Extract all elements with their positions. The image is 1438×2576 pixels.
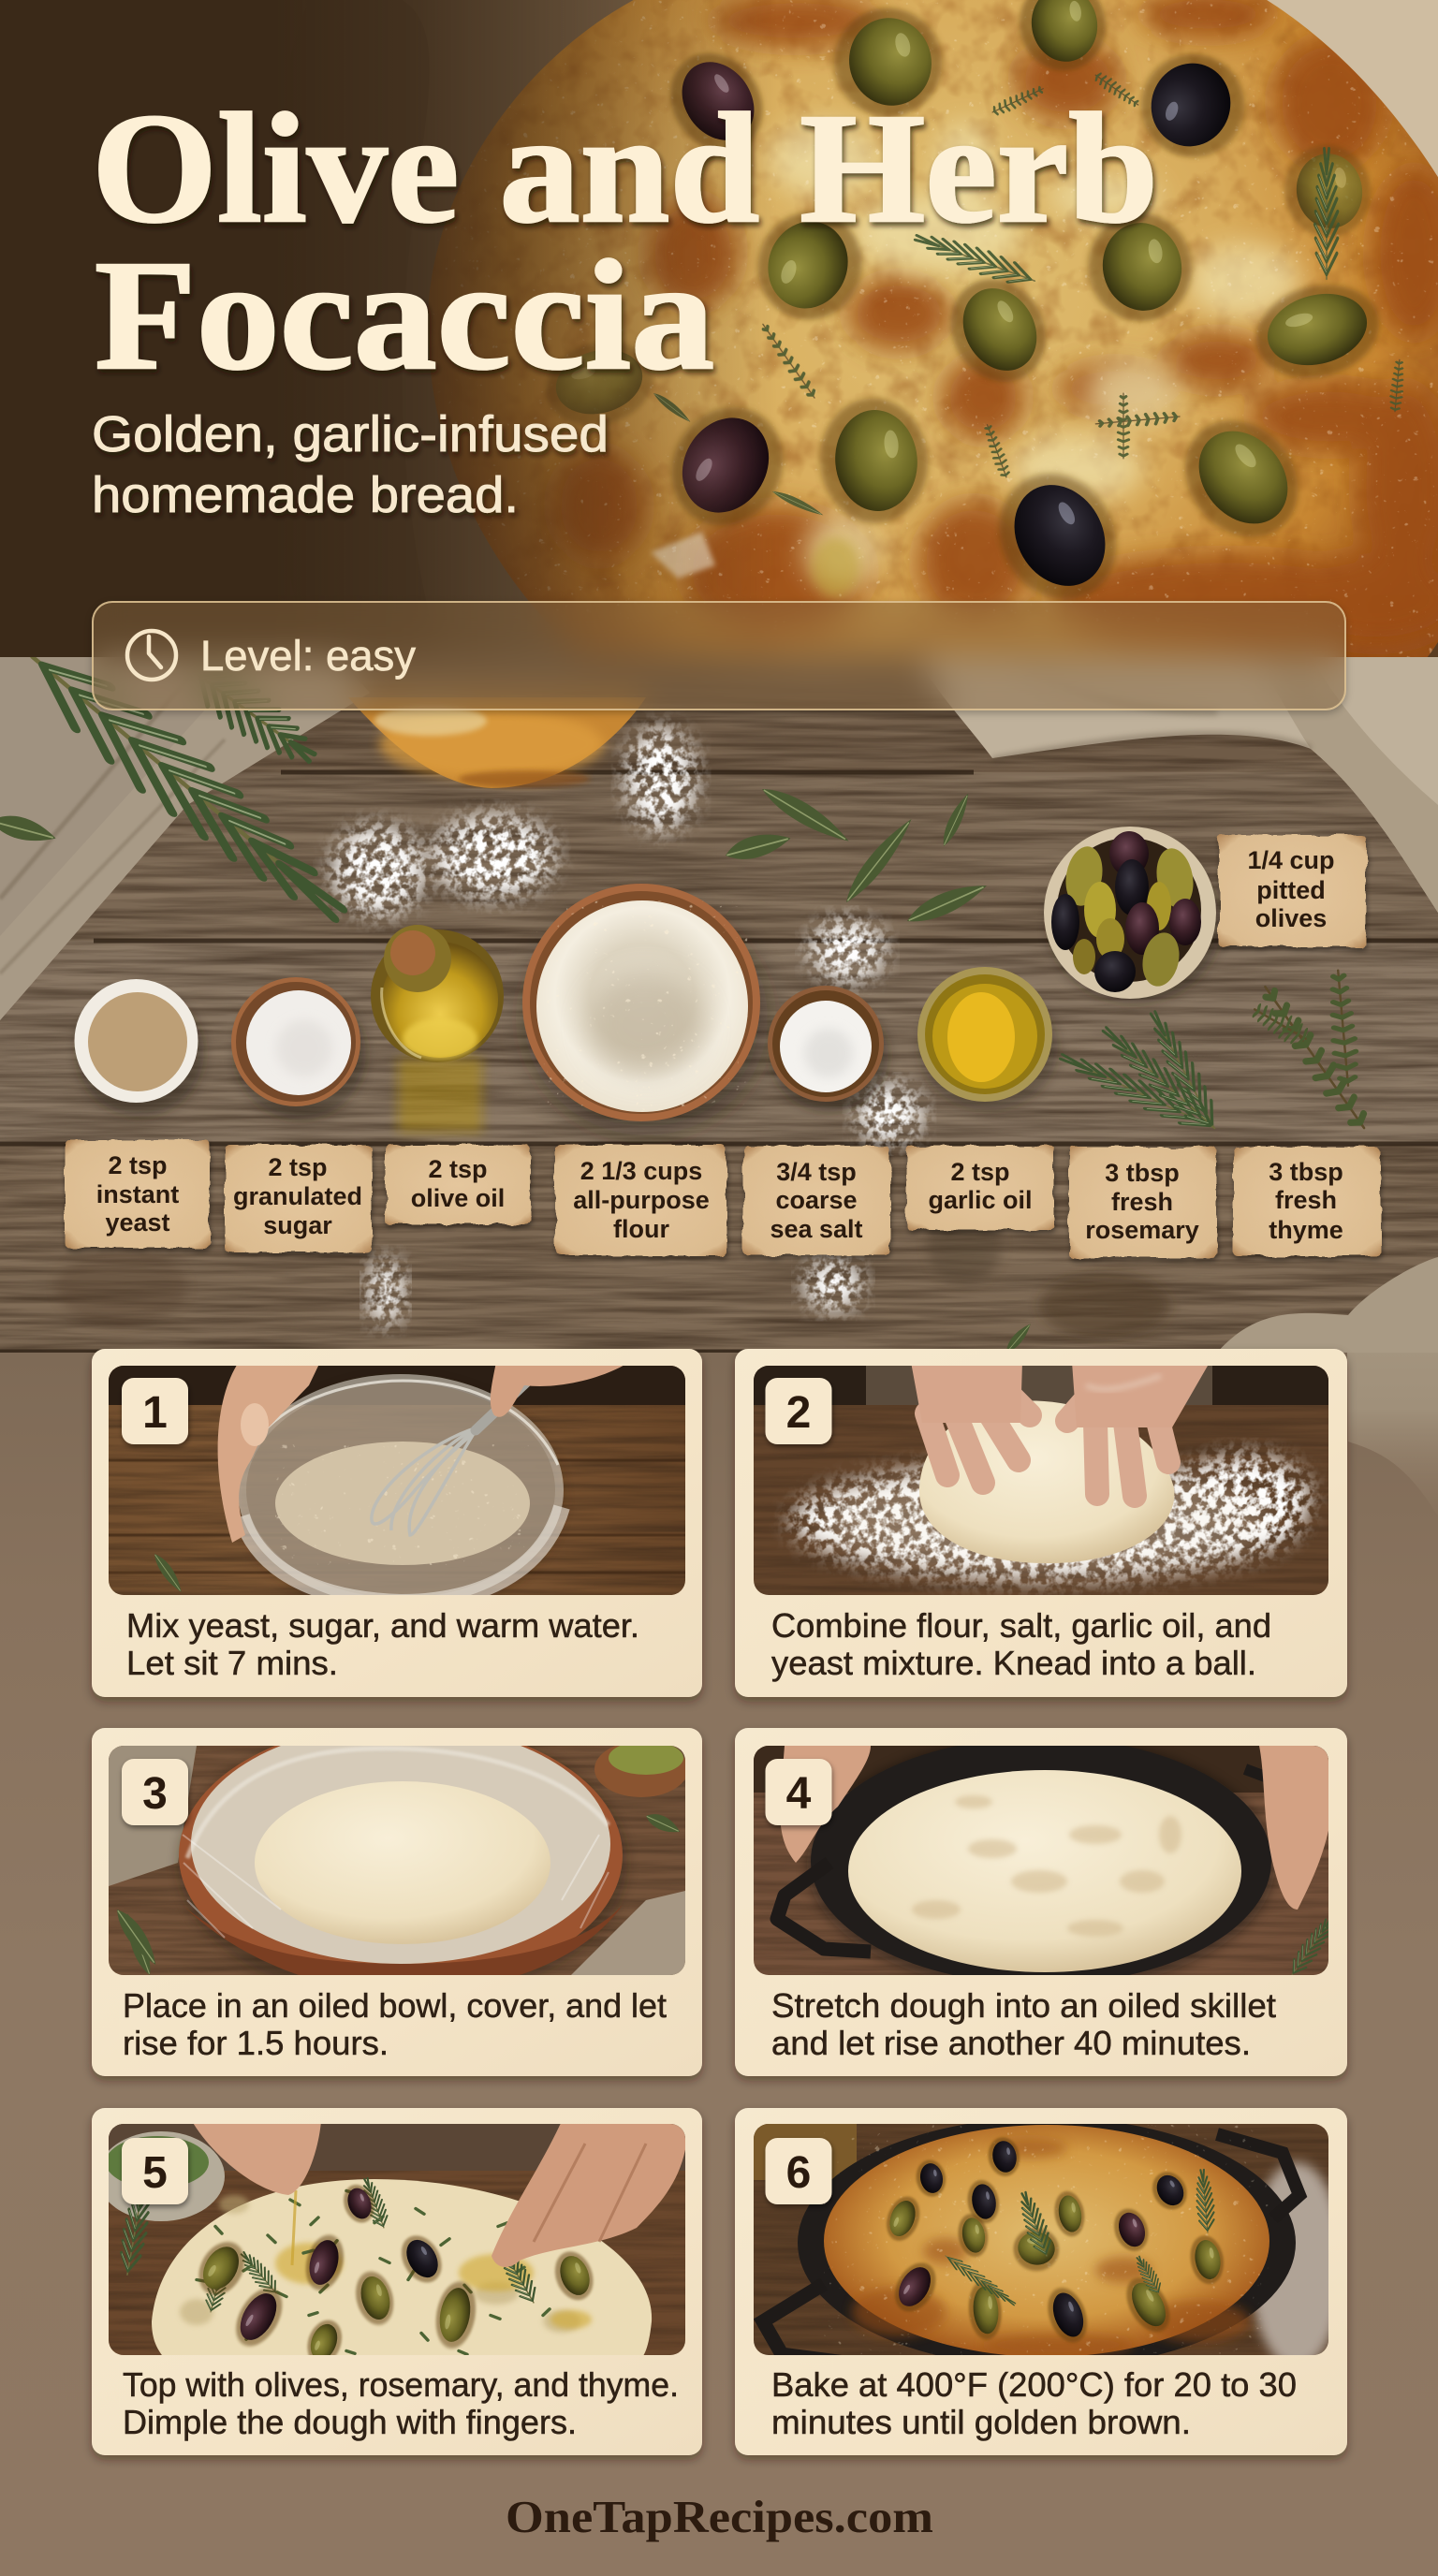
hero photo: focaccia <box>0 0 1438 711</box>
ingredient: rosemary sprigs <box>1057 1007 1225 1138</box>
difficulty level text: Level: easy <box>200 631 416 680</box>
step 4 photo: dough stretched in skillet <box>754 1737 1341 1992</box>
step 2 card <box>735 1349 1347 1697</box>
ingredient labels <box>65 835 1381 1258</box>
icon: olive leaves <box>0 780 1034 1355</box>
ingredient: granulated sugar bowl <box>231 977 366 1120</box>
step 3 text: rise for 1.5 hours. <box>123 2024 389 2062</box>
number badge 6 <box>766 2138 831 2204</box>
label: pitted olives <box>1219 835 1366 946</box>
step 1 text: Mix yeast, sugar, and warm water. <box>126 1606 639 1645</box>
label: fresh thyme: 3 tbsp <box>1269 1158 1343 1186</box>
label: olive oil <box>386 1145 531 1224</box>
linen cloth right <box>917 657 1438 913</box>
step 1 text <box>126 1606 639 1682</box>
footer website: OneTapRecipes.com <box>506 2491 933 2542</box>
icon: rosemary and thyme on bread <box>652 70 1404 519</box>
label: all-purpose flour: all-purpose <box>573 1186 710 1214</box>
step 3 card <box>92 1722 702 2076</box>
step 4 card <box>735 1728 1347 2076</box>
label: granulated sugar <box>225 1145 372 1252</box>
ingredient: thyme sprigs <box>1249 969 1373 1134</box>
label: fresh rosemary: fresh <box>1111 1188 1173 1216</box>
label: coarse sea salt: 3/4 tsp <box>776 1158 857 1186</box>
label: instant yeast <box>65 1140 210 1248</box>
label: garlic oil: garlic oil <box>928 1186 1033 1214</box>
step 4 text: and let rise another 40 minutes. <box>771 2024 1251 2062</box>
label: granulated sugar: sugar <box>263 1211 332 1239</box>
subtitle: homemade bread. <box>92 467 519 523</box>
loaf edge under the bar <box>348 697 646 788</box>
label: fresh thyme: thyme <box>1269 1216 1343 1244</box>
label: coarse sea salt: sea salt <box>770 1215 863 1243</box>
ingredient: instant yeast bowl <box>75 979 204 1117</box>
linen cloth left <box>0 657 370 1020</box>
step 3 text <box>123 1986 667 2062</box>
icon: clock <box>127 631 176 680</box>
number badge 3: 3 <box>142 1769 168 1819</box>
step 5 photo: topping dimpled dough <box>97 2121 688 2369</box>
label: fresh thyme: fresh <box>1275 1186 1337 1214</box>
step 5 card <box>92 2108 702 2455</box>
flour dust <box>331 727 923 1325</box>
number badge 1 <box>122 1378 188 1444</box>
number badge 4: 4 <box>786 1769 812 1819</box>
subtitle <box>92 406 609 523</box>
step 2 text: Combine flour, salt, garlic oil, and <box>771 1606 1271 1645</box>
label: instant yeast: 2 tsp <box>108 1151 168 1179</box>
title: Focaccia <box>95 228 714 402</box>
label: all-purpose flour: 2 1/3 cups <box>580 1157 702 1185</box>
number badge 4 <box>766 1759 831 1825</box>
difficulty bar <box>92 601 1346 710</box>
number badge 5: 5 <box>142 2148 168 2198</box>
step 5 text: Dimple the dough with fingers. <box>123 2403 577 2441</box>
step 3 text: Place in an oiled bowl, cover, and let <box>123 1986 667 2025</box>
label: all-purpose flour <box>555 1145 726 1256</box>
step 6 text <box>771 2365 1297 2441</box>
step 1 photo: whisking yeast in glass bowl <box>109 1362 685 1617</box>
ingredient: coarse sea salt bowl <box>768 986 888 1112</box>
icon: olives on hero bread <box>536 0 1389 621</box>
step 3 photo: dough rising in covered bowl <box>109 1722 688 2003</box>
label: pitted olives: olives <box>1255 904 1327 932</box>
ingredient: pitted olives bowl <box>1044 827 1221 1003</box>
label: olive oil: olive oil <box>411 1184 505 1212</box>
label: fresh rosemary <box>1069 1147 1216 1258</box>
label: coarse sea salt <box>743 1146 890 1255</box>
linen cloth beside steps <box>1347 1353 1438 1516</box>
ingredient: all-purpose flour bowl <box>522 884 768 1135</box>
step 4 text: Stretch dough into an oiled skillet <box>771 1986 1276 2025</box>
step 1 card <box>92 1349 702 1697</box>
wood table with ingredients background <box>0 633 1438 1355</box>
step 2 text <box>771 1606 1271 1682</box>
label: all-purpose flour: flour <box>613 1215 669 1243</box>
number badge 3 <box>122 1759 188 1825</box>
number badge 5 <box>122 2138 188 2204</box>
label: garlic oil: 2 tsp <box>950 1158 1010 1186</box>
number badge 6: 6 <box>786 2148 811 2198</box>
title: Olive and Herb <box>92 81 1158 256</box>
step 6 text: Bake at 400°F (200°C) for 20 to 30 <box>771 2365 1297 2404</box>
linen cloth bottom right <box>1217 1257 1438 1353</box>
number badge 2: 2 <box>786 1388 811 1438</box>
label: granulated sugar: 2 tsp <box>268 1153 328 1181</box>
step 4 text <box>771 1986 1276 2062</box>
step 1 text: Let sit 7 mins. <box>126 1644 338 1682</box>
step 6 text: minutes until golden brown. <box>771 2403 1191 2441</box>
subtitle: Golden, garlic-infused <box>92 406 609 462</box>
number badge 1: 1 <box>142 1388 168 1438</box>
ingredient: olive oil bottle <box>371 925 504 1133</box>
label: fresh rosemary: rosemary <box>1085 1216 1199 1244</box>
label: instant yeast: yeast <box>105 1208 170 1237</box>
icon: rosemary branch top left <box>30 657 347 923</box>
label: fresh thyme <box>1233 1147 1381 1256</box>
label: garlic oil <box>907 1146 1053 1230</box>
step 5 text <box>123 2365 679 2441</box>
label: pitted olives: 1/4 cup <box>1247 846 1335 874</box>
step 2 text: yeast mixture. Knead into a ball. <box>771 1644 1256 1682</box>
label: instant yeast: instant <box>96 1180 179 1208</box>
label: pitted olives: pitted <box>1256 876 1326 904</box>
label: coarse sea salt: coarse <box>775 1186 858 1214</box>
title <box>92 81 1158 402</box>
step 5 text: Top with olives, rosemary, and thyme. <box>123 2365 679 2404</box>
number badge 2 <box>766 1378 831 1444</box>
label: granulated sugar: granulated <box>233 1182 362 1210</box>
step 6 card <box>735 2108 1347 2455</box>
step 2 photo: kneading dough <box>754 1362 1328 1595</box>
step 6 photo: baked focaccia in skillet <box>754 2117 1343 2368</box>
ingredient: garlic oil glass dish <box>917 967 1058 1110</box>
label: olive oil: 2 tsp <box>428 1155 488 1183</box>
label: fresh rosemary: 3 tbsp <box>1105 1159 1180 1187</box>
